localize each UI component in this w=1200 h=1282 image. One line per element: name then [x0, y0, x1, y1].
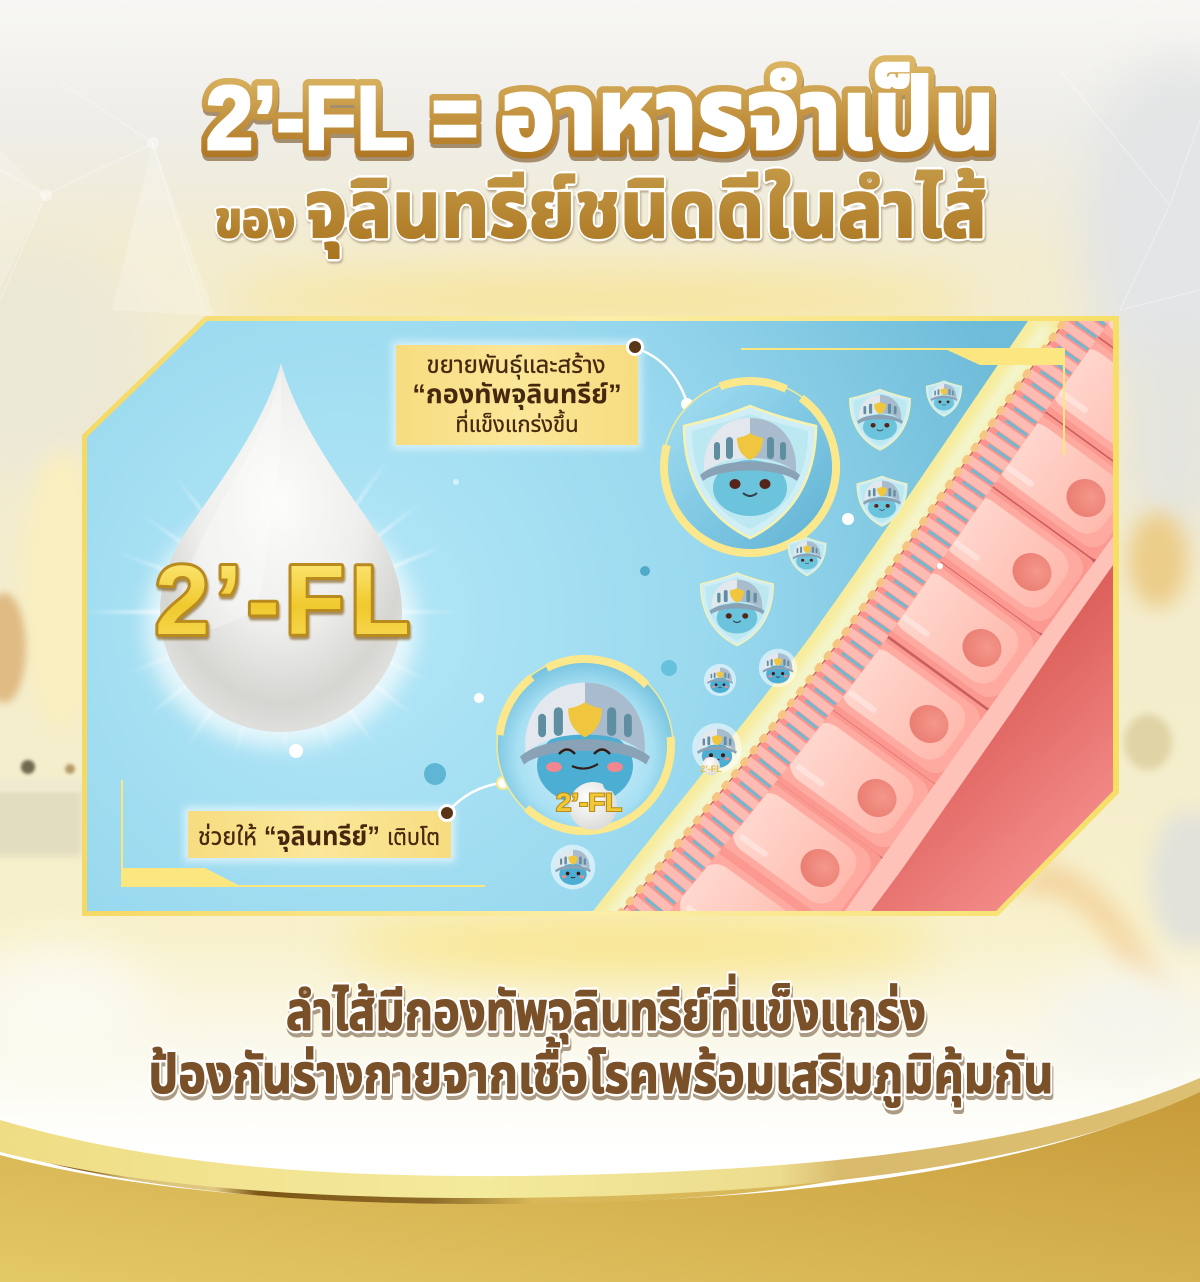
icon: eating mascot in ring: [470, 630, 700, 860]
heading: 2'-FL gold: 2’-FL: [155, 545, 410, 655]
label: 2'-FL on ball: 2’-FL: [556, 789, 622, 817]
icon: milk drop: [146, 363, 416, 747]
villi: [617, 321, 1110, 911]
callout: strengthen army: ขยายพันธุ์และสร้าง: [426, 352, 606, 380]
title line 2: ของ: [215, 192, 295, 248]
blue lumen background: [80, 315, 1120, 915]
callout: microbes grow: [184, 807, 455, 862]
callout: strengthen army: ที่แข็งแกร่งขึ้น: [455, 409, 579, 437]
bottom gold curved band: [0, 1078, 1200, 1282]
panel scene: [87, 321, 1113, 911]
floating dots: [289, 479, 943, 785]
panel: 2'-FL and gut diagram: [82, 316, 1119, 916]
body line 1: ลำไส้มีกองทัพจุลินทรีย์ที่แข็งแกร่ง: [286, 974, 926, 1044]
icon: small helmet mascots: [551, 649, 797, 889]
icon: small shield mascots: [701, 381, 962, 646]
icon: shield mascot in ring: [630, 347, 870, 587]
glow rays behind drop: [96, 471, 446, 737]
title: [206, 59, 995, 258]
callout: strengthen army: [392, 341, 642, 449]
epithelial cells: [670, 321, 1113, 911]
title line 1: =: [432, 69, 478, 169]
body text: [148, 974, 1054, 1107]
intestinal tissue: [624, 321, 1113, 911]
callout: strengthen army: “กองทัพจุลินทรีย์”: [412, 379, 622, 410]
body line 2: ป้องกันร่างกายจากเชื้อโรคพร้อมเสริมภูมิคุ้มกัน: [148, 1037, 1054, 1107]
label: small 2'-FL: 2’-FL: [700, 764, 722, 774]
basement membrane: [845, 536, 1113, 911]
submucosa red: [871, 565, 1113, 911]
connector: bottom callout to eating mascot: [438, 777, 509, 822]
yellow mucus band: [590, 315, 1120, 925]
panel border: [82, 316, 1119, 916]
connector: top callout to shield mascot: [626, 338, 693, 410]
title line 1: [206, 59, 995, 171]
title line 2: จุลินทรีย์ชนิดดีในลำไส้: [305, 165, 987, 258]
callout: microbes grow: ช่วยให้ “จุลินทรีย์” เติบโต: [198, 821, 440, 852]
title line 1: อาหารจำเป็น: [499, 59, 995, 171]
decorative bracket lines: [121, 348, 1065, 887]
title line 1: 2’-FL: [206, 69, 408, 169]
